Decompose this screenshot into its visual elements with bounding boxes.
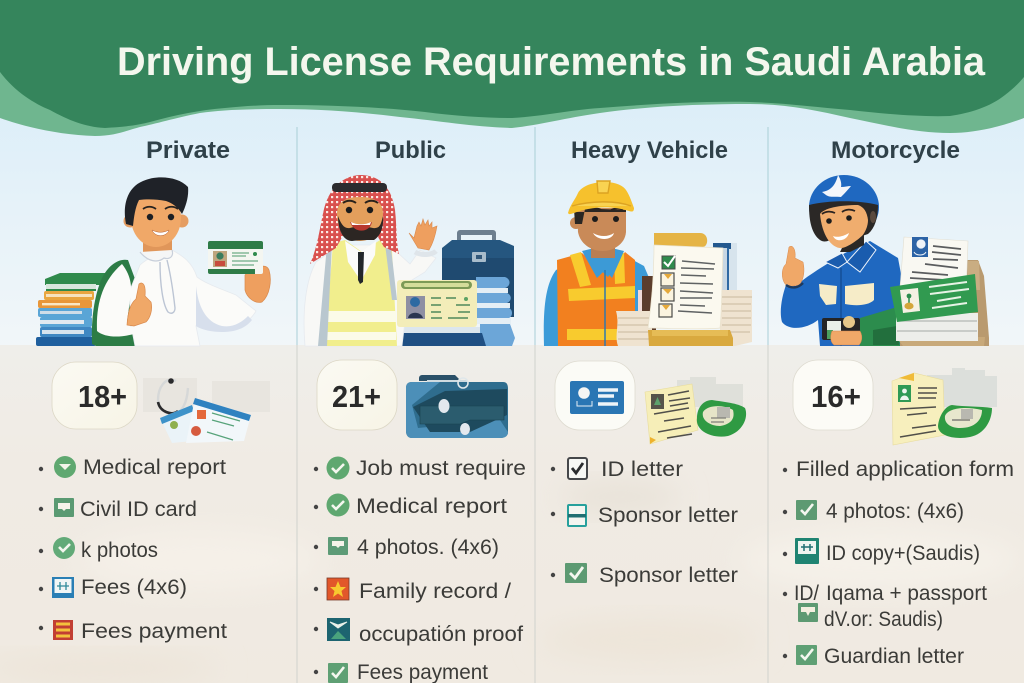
character: worker in hard hat	[544, 181, 650, 346]
heading: public: Public	[375, 137, 446, 164]
icon: application papers and folder	[890, 237, 989, 346]
panel: heavy vehicle requirements	[551, 361, 746, 587]
list: motorcycle requirements: ID/	[794, 582, 819, 605]
panel: motorcycle	[781, 137, 989, 346]
age badge: 18+	[52, 362, 137, 429]
list: public requirements: occupatión proof	[359, 623, 523, 646]
badge: blue ID icon	[555, 361, 635, 430]
age badge: 16+	[793, 360, 873, 430]
list: motorcycle requirements	[783, 458, 1014, 668]
icon: stethoscope and medical cards	[143, 378, 270, 443]
icon: briefcase and books	[389, 230, 515, 346]
list: motorcycle requirements: 4 photos: (4x6)	[826, 500, 964, 523]
panel: private	[36, 137, 270, 346]
heading: heavy vehicle: Heavy Vehicle	[571, 137, 728, 164]
sky background	[0, 0, 1024, 346]
panel: private requirements	[39, 362, 270, 643]
list: motorcycle requirements: dV.or: Saudis)	[824, 608, 943, 631]
list: heavy vehicle requirements: Sponsor letter	[598, 504, 738, 527]
icon: dark briefcase	[406, 375, 508, 438]
icon: watch and hand	[822, 307, 900, 346]
character: young man in thobe	[92, 177, 270, 346]
list: motorcycle requirements: Guardian letter	[824, 645, 964, 668]
list: private requirements: k photos	[81, 539, 158, 562]
list: private requirements: Fees (4x6)	[81, 576, 187, 599]
age badge: 21+	[317, 360, 397, 430]
list: public requirements: Family record /	[359, 580, 511, 603]
list: private requirements: Medical report	[83, 456, 226, 479]
panel: heavy vehicle	[544, 137, 752, 346]
heading: private: Private	[146, 137, 230, 164]
list: private requirements	[39, 456, 227, 643]
column dividers	[297, 127, 768, 683]
panel: motorcycle requirements	[783, 360, 1014, 668]
list: public requirements: 4 photos. (4x6)	[357, 536, 499, 559]
list: public requirements: Job must require	[356, 457, 526, 480]
panel: public requirements	[314, 360, 526, 683]
character: motorcycle rider	[781, 175, 904, 346]
header banner	[0, 0, 1024, 136]
icon: document and green wallet	[892, 368, 997, 445]
age badge: 21+: 21+	[332, 379, 381, 414]
icon: license card	[208, 241, 263, 274]
heading: motorcycle: Motorcycle	[831, 137, 960, 164]
character: man in keffiyeh and vest	[304, 175, 437, 346]
list: private requirements: Fees payment	[81, 620, 227, 643]
age badge: 18+: 18+	[78, 379, 127, 414]
icon: document and green wallet	[645, 377, 746, 444]
list: motorcycle requirements: Iqama + passport	[826, 582, 987, 605]
title: Driving License Requirements in Saudi Arabia	[117, 40, 986, 84]
icon: stack of books	[36, 273, 106, 346]
list: heavy vehicle requirements: Sponsor letter	[599, 564, 738, 587]
list: motorcycle requirements: ID copy+(Saudis)	[826, 542, 980, 565]
panel: public	[304, 137, 515, 346]
list: heavy vehicle requirements: ID letter	[601, 458, 683, 481]
list: public requirements	[314, 456, 526, 683]
list: private requirements: Civil ID card	[80, 498, 197, 521]
icon: stacked paperwork	[616, 233, 752, 346]
list: heavy vehicle requirements	[551, 458, 738, 587]
age badge: 16+: 16+	[811, 379, 861, 414]
list: public requirements: Medical report	[356, 495, 507, 518]
sand background	[0, 345, 1024, 683]
icon: ID card	[397, 280, 477, 327]
list: motorcycle requirements: Filled application form	[796, 458, 1014, 481]
